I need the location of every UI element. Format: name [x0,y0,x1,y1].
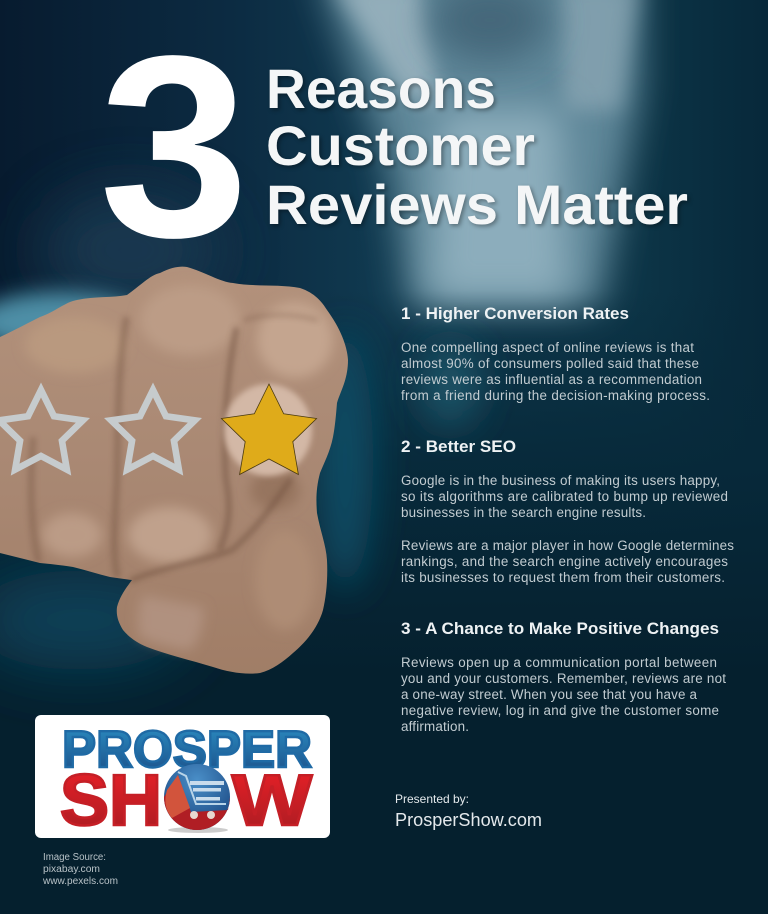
icon: shopping cart ball [164,764,230,833]
presented by: ProsperShow.com [395,810,542,830]
section 3: positive changes [401,619,726,734]
index fingernail [224,384,312,476]
body 2: Reviews are a major player in how Google determines [401,538,734,553]
title [266,57,688,236]
body 1: One compelling aspect of online reviews is that [401,340,694,355]
logo: Prosper Show: W [232,761,312,841]
body 1: almost 90% of consumers polled said that these [401,356,699,371]
body 3 [401,655,726,734]
image source credits: Image Source: [43,852,106,863]
body 2: so its algorithms are calibrated to bump up reviewed [401,489,728,504]
icon: outline star 1 [0,390,83,470]
image source credits: pixabay.com [43,864,100,875]
body 2: its businesses to request them from their customers. [401,570,725,585]
body 2: businesses in the search engine results. [401,505,646,520]
body 3: negative review, log in and give the customer some [401,703,719,718]
body 3: you and your customers. Remember, reviews are not [401,671,726,686]
body 2: Google is in the business of making its users happy, [401,473,720,488]
body 2: rankings, and the search engine actively encourages [401,554,728,569]
title: Reviews Matter [266,173,688,236]
icon: gold star [221,384,317,474]
heading 1: 1 - Higher Conversion Rates [401,304,629,323]
image source credits: www.pexels.com [42,876,118,887]
body 3: Reviews open up a communication portal between [401,655,717,670]
finger creases [31,315,316,580]
thumb nail [138,595,203,650]
title: Reasons [266,57,496,120]
big numeral 3: 3 [99,2,249,291]
presented by: Presented by: [395,792,469,806]
body 2 [401,473,734,585]
logo: Prosper Show: SH [60,761,162,841]
body 1 [401,340,710,403]
body 1: from a friend during the decision-making process. [401,388,710,403]
hand pointing at stars [0,260,360,680]
title: Customer [266,114,535,177]
body 1: reviews were as influential as a recommendation [401,372,702,387]
logo: Prosper Show [35,715,330,841]
icon: outline star 2 [111,390,195,470]
image source credits [42,852,118,887]
body 3: affirmation. [401,719,469,734]
section 1: higher conversion rates [401,304,710,403]
presented by [395,792,542,830]
heading 2: 2 - Better SEO [401,437,516,456]
section 2: better SEO [401,437,734,585]
body 3: a one-way street. When you see that you have a [401,687,698,702]
logo: Prosper Show: PROSPER [62,721,312,779]
knuckle highlights [25,285,333,630]
heading 3: 3 - A Chance to Make Positive Changes [401,619,719,638]
